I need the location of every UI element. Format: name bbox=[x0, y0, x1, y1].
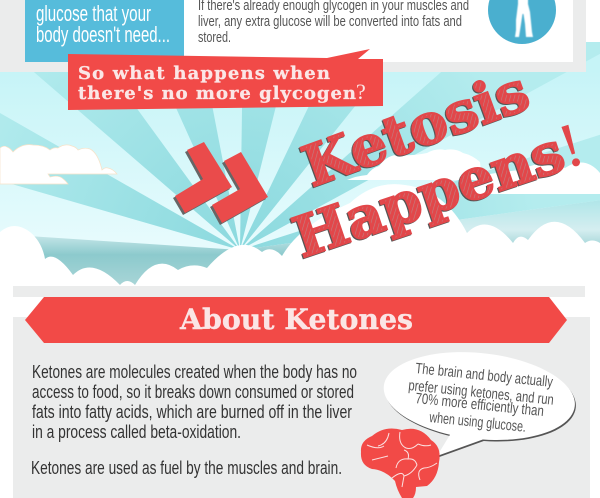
speech bubble: when using glucose. bbox=[428, 409, 527, 436]
cloud bank: foreground bbox=[0, 184, 600, 290]
cloud: right flat bbox=[470, 163, 600, 194]
callout: so what happens: ? bbox=[356, 79, 366, 104]
speech bubble bbox=[384, 352, 576, 458]
speech bubble: The brain and body actually bbox=[415, 360, 554, 391]
text: ketones description: Ketones are molecules created when the body has no bbox=[32, 362, 357, 382]
text: glycogen explanation: liver, any extra glucose will be converted into fats and bbox=[198, 13, 462, 30]
callout: so what happens bbox=[68, 49, 383, 110]
heading ribbon: About Ketones: About Ketones bbox=[179, 303, 413, 336]
speech bubble: 70% more efficiently than bbox=[415, 390, 545, 420]
title: Ketosis Happens: Happens bbox=[285, 119, 573, 271]
panel: blue callout: body doesn't need... bbox=[36, 22, 170, 47]
icon: brain bbox=[361, 428, 440, 498]
cloud: upper left bbox=[0, 145, 117, 184]
text: glycogen explanation: stored. bbox=[198, 29, 231, 46]
callout: so what happens: So what happens when bbox=[78, 63, 330, 84]
title: Ketosis Happens: Ketosis bbox=[294, 58, 538, 200]
panel: glucose top section bbox=[0, 0, 586, 72]
icon: body in blue circle bbox=[488, 0, 556, 44]
title: Ketosis Happens: ! bbox=[551, 110, 591, 181]
text: ketones description: in a process called beta-oxidation. bbox=[32, 422, 241, 442]
cloud: upper right flat bbox=[347, 149, 482, 180]
sky background with sun rays bbox=[0, 42, 600, 285]
panel: blue callout: glucose that your bbox=[36, 1, 151, 26]
panel: about ketones background bbox=[13, 286, 590, 498]
title: Ketosis Happens: Happens bbox=[284, 120, 572, 272]
panel: blue callout bbox=[25, 0, 184, 62]
icon: double chevron arrow bbox=[173, 142, 268, 225]
title: Ketosis Happens: Ketosis bbox=[293, 59, 537, 201]
text: ketones description bbox=[31, 362, 357, 478]
title: Ketosis Happens bbox=[284, 58, 591, 272]
heading ribbon: About Ketones bbox=[25, 297, 567, 343]
text: ketones description: Ketones are used as fuel by the muscles and brain. bbox=[31, 458, 342, 478]
text: glycogen explanation bbox=[198, 0, 469, 46]
callout: so what happens: there's no more glycogen bbox=[78, 83, 356, 104]
speech bubble: prefer using ketones, and run bbox=[408, 377, 555, 409]
text: ketones description: fats into fatty acids, which are burned off in the liver bbox=[32, 402, 352, 422]
text: ketones description: access to food, so it breaks down consumed or stored bbox=[32, 382, 354, 402]
